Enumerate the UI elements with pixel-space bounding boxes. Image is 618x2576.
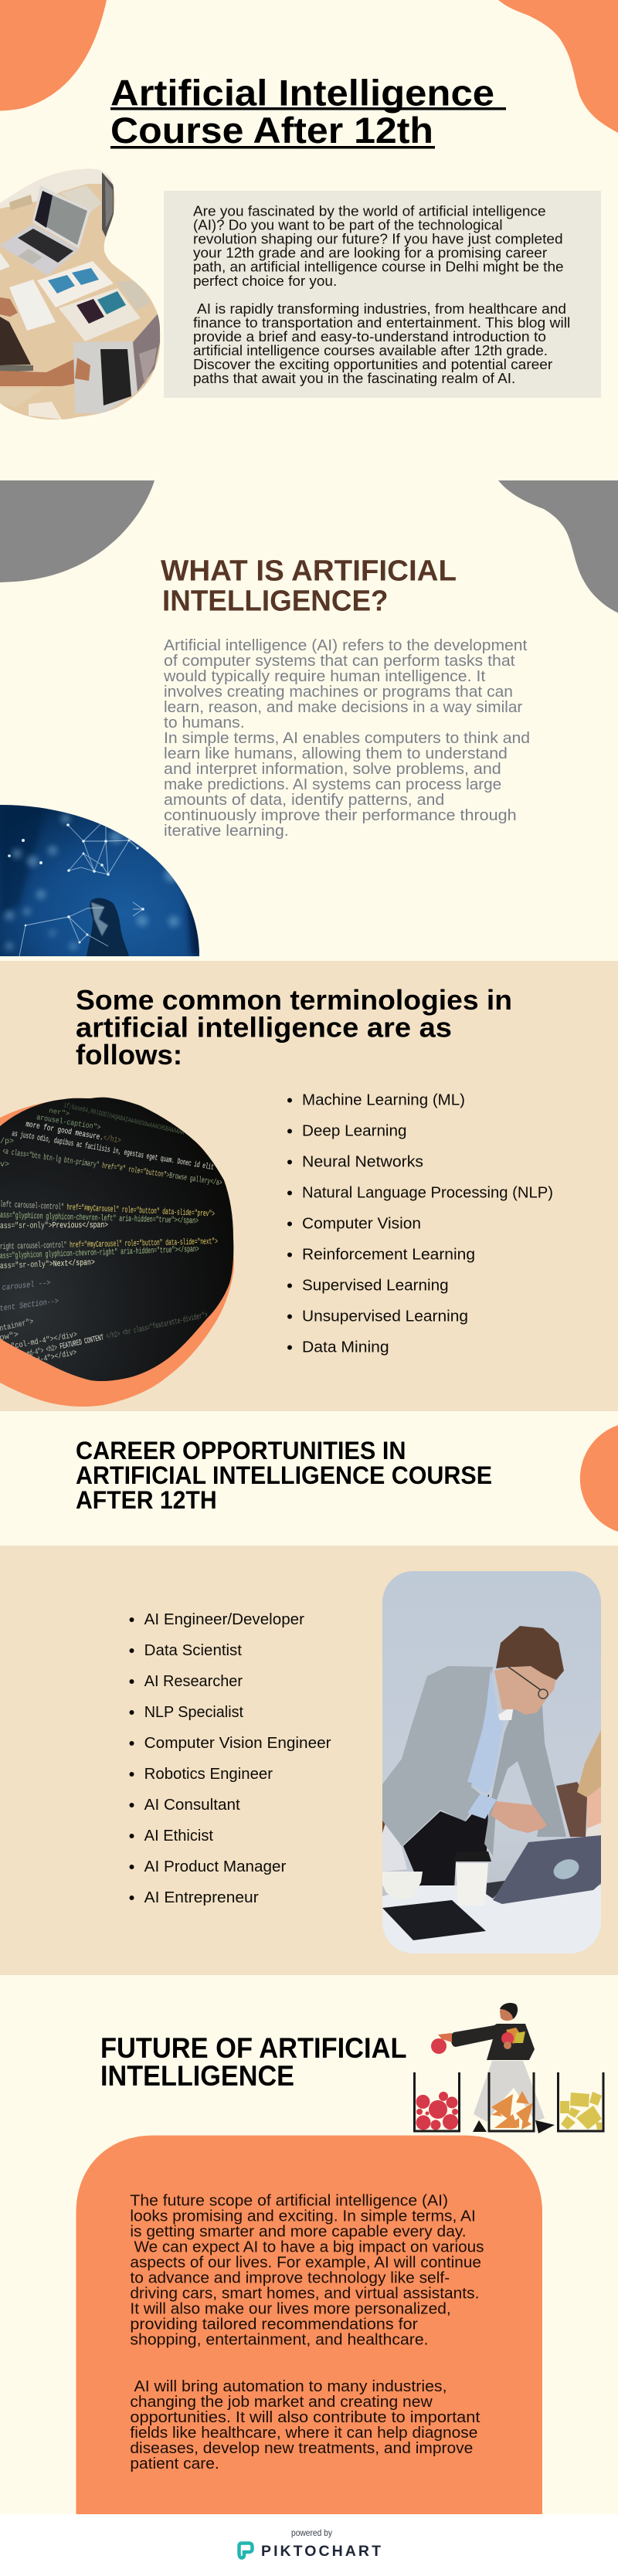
image: source code on a screen: carousel -->	[2, 1278, 51, 1293]
image: source code on a screen: if;base64,R0lGODlhAQABAIAAAHd3dwAAACH5BAAAAAA	[63, 1101, 185, 1137]
heading: career opportunities	[76, 1437, 492, 1514]
image: source code on a screen: /p>	[0, 1137, 14, 1146]
figure: person	[431, 2003, 555, 2133]
text: introduction paragraphs: perfect choice for you.	[193, 273, 337, 289]
image: source code on a screen: nd-4"></div>	[32, 1348, 78, 1366]
list: career roles: AI Ethicist	[144, 1828, 213, 1845]
text: definition of AI: continuously improve their performance through	[164, 807, 517, 824]
image: source code on a screen	[0, 1093, 239, 1386]
text: definition of AI: involves creating machines or programs that can	[164, 684, 513, 701]
heading: future of AI	[100, 2032, 406, 2092]
list: career roles: AI Consultant	[144, 1797, 240, 1814]
image: source code on a screen: more for good measure.</h1>	[25, 1120, 121, 1146]
image: source code on a screen: right carousel-control" href="#myCarousel" role="button" data-slide="next">	[0, 1237, 218, 1252]
text: introduction paragraphs	[193, 204, 570, 386]
image: source code on a screen: arousel-caption">	[36, 1113, 101, 1133]
heading: what is artificial intelligence: WHAT IS ARTIFICIAL	[161, 555, 457, 587]
text: introduction paragraphs: (AI)? Do you want to be part of the technological	[193, 218, 502, 233]
list: AI terminologies: Supervised Learning	[302, 1278, 449, 1295]
text: future scope paragraphs: AI will bring automation to many industries,	[134, 2378, 447, 2395]
heading: what is artificial intelligence	[161, 555, 457, 618]
text: introduction paragraphs: finance to transportation and entertainment. This blog will	[193, 315, 570, 331]
text: future scope paragraphs: It will also make our lives more personalized,	[130, 2301, 451, 2318]
text: definition of AI: make predictions. AI systems can process large	[164, 776, 501, 793]
heading: common terminologies: follows:	[76, 1039, 182, 1071]
list: AI terminologies: Natural Language Processing (NLP)	[302, 1185, 553, 1202]
title: Artificial Intelligence	[110, 73, 494, 113]
list: AI terminologies: Machine Learning (ML)	[302, 1092, 465, 1109]
text: future scope paragraphs: diseases, develop new treatments, and improve	[130, 2440, 473, 2457]
image: source code on a screen: left carousel-control" href="#myCarousel" role="button" data-slide="prev">	[0, 1200, 215, 1220]
text: Piktochart wordmark: PIKTOCHART	[261, 2543, 381, 2560]
blob: gray right	[498, 480, 618, 613]
blob: gray left	[0, 480, 154, 582]
text: definition of AI: of computer systems that can perform tasks that	[164, 653, 515, 670]
band: terminologies background	[0, 961, 618, 1411]
text: introduction paragraphs: Discover the exciting opportunities and potential career	[193, 357, 552, 372]
list: career roles: Computer Vision Engineer	[144, 1735, 331, 1752]
list: career roles: Data Scientist	[144, 1642, 242, 1659]
image: source code on a screen: tent Section-->	[0, 1297, 59, 1314]
text: introduction paragraphs: paths that await you in the fascinating realm of AI.	[193, 371, 515, 386]
image: source code on a screen: ass="sr-only">Next</span>	[0, 1258, 95, 1271]
text: powered by: powered by	[291, 2527, 332, 2538]
illustration: person sorting shapes into jars	[414, 2003, 603, 2133]
image: source code on a screen: ass="sr-only">Previous</span>	[0, 1221, 108, 1231]
heading: career opportunities: AFTER 12TH	[76, 1486, 217, 1514]
text: future scope paragraphs: The future scope of artificial intelligence (AI)	[130, 2192, 448, 2209]
image: source code on a screen: ol-md-4"> <h2> FEATURED CONTENT </h2> <hr class="featurette-divider">	[18, 1311, 209, 1361]
image: source code on a screen: ntainer">	[0, 1317, 35, 1334]
heading: common terminologies: Some common terminologies in	[76, 984, 512, 1016]
title	[110, 73, 506, 151]
icon: jar of orange pyramids	[489, 2072, 534, 2131]
shape: orange circle at right edge	[580, 1425, 618, 1532]
text: introduction paragraphs: revolution shaping our future? If you have just completed	[193, 232, 563, 247]
text: introduction paragraphs: AI is rapidly transforming industries, from healthcare and	[197, 301, 566, 317]
panel: introduction	[164, 191, 601, 398]
list: career roles: AI Product Manager	[144, 1858, 287, 1875]
text: definition of AI	[163, 637, 530, 840]
text: future scope paragraphs: opportunities. It will also contribute to important	[130, 2409, 480, 2426]
heading: what is artificial intelligence: INTELLIGENCE?	[162, 585, 388, 618]
image: source code on a screen: ass="glyphicon glyphicon-chevron-right" aria-hidden="true"></span>	[0, 1245, 199, 1261]
heading: future of AI: INTELLIGENCE	[100, 2060, 294, 2092]
heading: career opportunities: ARTIFICIAL INTELLIGENCE COURSE	[76, 1461, 492, 1489]
text: definition of AI: learn like humans, allowing them to understand	[164, 745, 508, 762]
blob: top left orange	[0, 0, 107, 111]
list: career roles: AI Entrepreneur	[144, 1889, 259, 1906]
image: laptops on a desk	[0, 162, 166, 425]
text: future scope paragraphs: patient care.	[130, 2456, 219, 2472]
icon: Piktochart logo	[239, 2543, 252, 2558]
blob: orange behind code image	[0, 1098, 234, 1407]
text: definition of AI: to humans.	[164, 714, 245, 731]
text: future scope paragraphs	[130, 2192, 484, 2472]
text: definition of AI: amounts of data, identify patterns, and	[164, 792, 444, 809]
blob: top right orange	[498, 0, 618, 133]
image: source code on a screen: <a class="btn btn-lg btn-primary" href="#" role="button">Browse gallery</a>	[2, 1147, 222, 1188]
text: future scope paragraphs: looks promising and exciting. In simple terms, AI	[130, 2208, 476, 2225]
image: source code on a screen: as justo odio, dapibus ac facilisis in, egestas eget quam. Donec id elit	[11, 1129, 215, 1173]
heading: future of AI: FUTURE OF ARTIFICIAL	[100, 2032, 406, 2064]
text: definition of AI: learn, reason, and make decisions in a way similar	[164, 699, 523, 716]
list: AI terminologies: Data Mining	[302, 1339, 389, 1356]
text: future scope paragraphs: fields like healthcare, where it can help diagnose	[130, 2425, 477, 2442]
text: future scope paragraphs: providing tailored recommendations for	[130, 2316, 418, 2333]
text: future scope paragraphs: We can expect AI to have a big impact on various	[134, 2238, 484, 2255]
text: future scope paragraphs: to advance and improve technology like self-	[130, 2269, 450, 2286]
band: careers background	[0, 1546, 618, 1975]
heading: career opportunities: CAREER OPPORTUNITIES IN	[76, 1437, 406, 1464]
list: career roles: AI Researcher	[144, 1673, 243, 1690]
text: definition of AI: In simple terms, AI enables computers to think and	[164, 730, 530, 747]
image: colleagues around a laptop	[382, 1571, 601, 1953]
list: AI terminologies	[287, 1092, 553, 1356]
text: future scope paragraphs: driving cars, smart homes, and virtual assistants.	[130, 2286, 479, 2303]
icon: jar of red spheres	[414, 2072, 459, 2131]
text: definition of AI: iterative learning.	[164, 823, 289, 840]
list: career roles: NLP Specialist	[144, 1704, 243, 1721]
image: source code on a screen: ass="glyphicon glyphicon-chevron-left" aria-hidden="true"></span>	[0, 1211, 199, 1227]
list: career roles	[130, 1611, 331, 1906]
footer: powered by Piktochart	[0, 2514, 618, 2576]
image: source code on a screen: ="col-md-4"></div>	[7, 1330, 78, 1352]
text: introduction paragraphs: your 12th grade and are looking for a promising career	[193, 246, 547, 261]
heading: common terminologies: artificial intelligence are as	[76, 1012, 452, 1044]
text: definition of AI: would typically require human intelligence. It	[163, 668, 486, 685]
list: AI terminologies: Reinforcement Learning	[302, 1247, 475, 1264]
image: neural network and robot hand	[0, 803, 202, 958]
text: introduction paragraphs: Are you fascinated by the world of artificial intelligence	[193, 204, 546, 219]
list: career roles: Robotics Engineer	[144, 1766, 273, 1783]
list: career roles: AI Engineer/Developer	[144, 1611, 304, 1628]
list: AI terminologies: Neural Networks	[302, 1154, 423, 1171]
title: Course After 12th	[110, 110, 433, 151]
text: future scope paragraphs: is getting smarter and more capable every day.	[130, 2223, 467, 2240]
text: introduction paragraphs: path, an artificial intelligence course in Delhi might be the	[193, 260, 564, 275]
text: future scope paragraphs: shopping, entertainment, and healthcare.	[130, 2332, 429, 2349]
text: introduction paragraphs: artificial intelligence courses available after 12th grade.	[193, 343, 548, 358]
icon: jar of yellow cubes	[558, 2072, 603, 2131]
text: definition of AI: and interpret information, solve problems, and	[164, 761, 501, 778]
heading: common terminologies	[76, 984, 512, 1071]
text: future scope paragraphs: aspects of our lives. For example, AI will continue	[130, 2254, 481, 2271]
panel: future scope	[76, 2136, 542, 2514]
image: source code on a screen: v>	[0, 1161, 9, 1169]
text: future scope paragraphs: changing the job market and creating new	[130, 2394, 433, 2411]
list: AI terminologies: Deep Learning	[302, 1123, 406, 1140]
text: definition of AI: Artificial intelligence (AI) refers to the development	[164, 637, 528, 654]
list: AI terminologies: Computer Vision	[302, 1216, 421, 1233]
image: source code on a screen: ner">	[48, 1107, 70, 1118]
list: AI terminologies: Unsupervised Learning	[302, 1308, 468, 1325]
text: introduction paragraphs: provide a brief and easy-to-understand introduction to	[193, 329, 546, 344]
